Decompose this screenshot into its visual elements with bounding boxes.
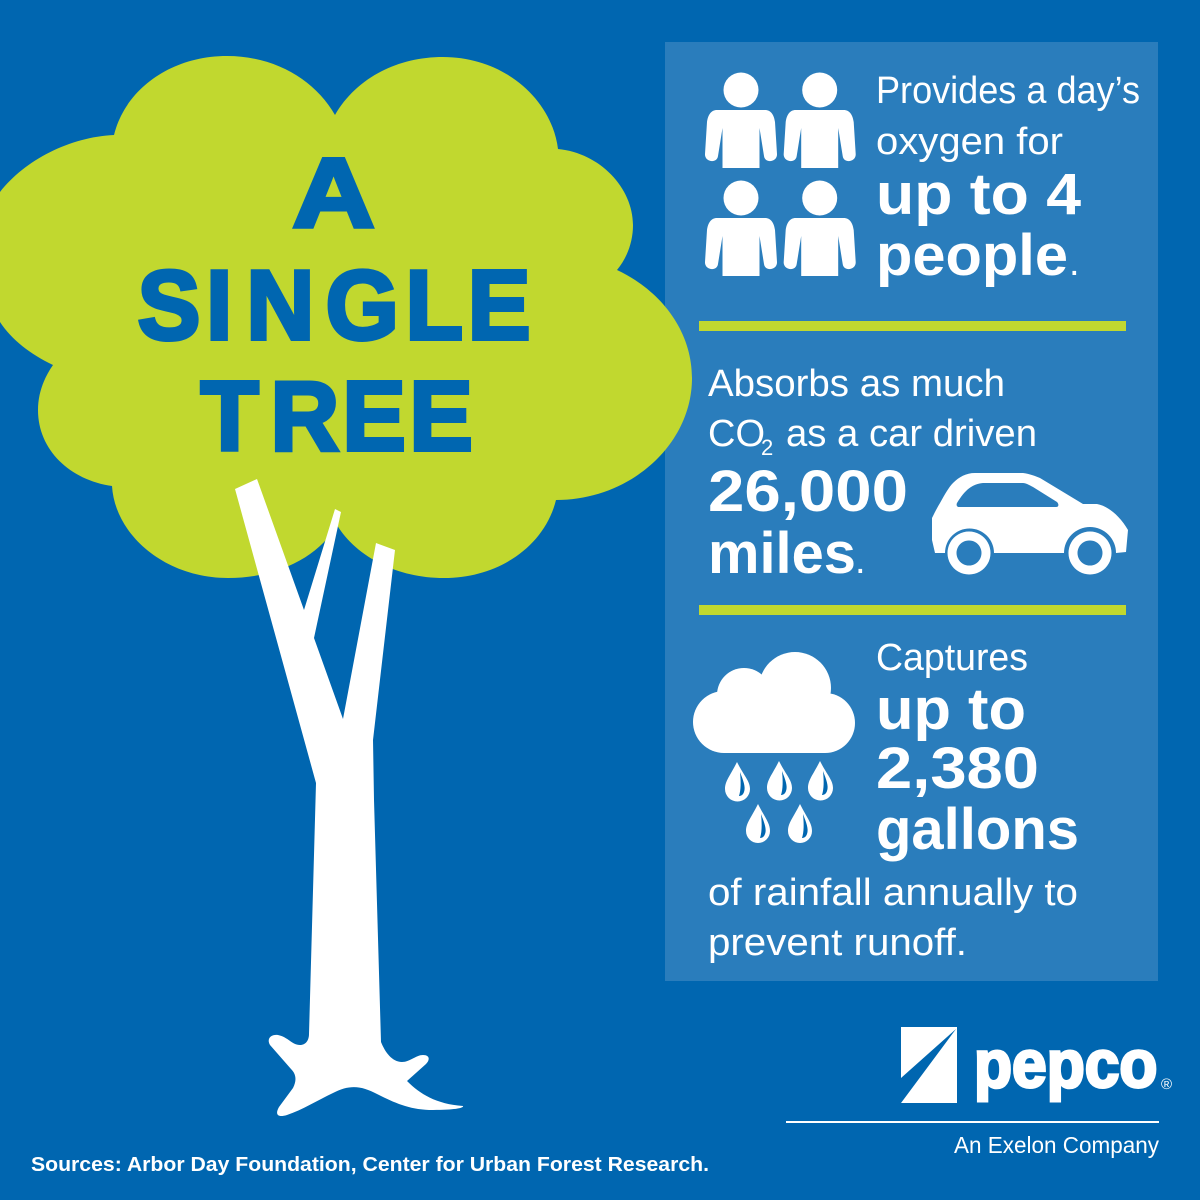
- text: CO2: miles: [708, 521, 856, 586]
- sources: Sources: Arbor Day Foundation, Center for Urban Forest Research.: [31, 1154, 709, 1176]
- text: oxygen: oxygen for: [876, 121, 1063, 163]
- text: oxygen: up to 4: [876, 162, 1081, 227]
- text: CO2: 2: [761, 435, 773, 460]
- title: A: [292, 139, 375, 248]
- tree canopy: [0, 56, 692, 578]
- text: rainfall: prevent runoff.: [708, 922, 967, 964]
- text: CO2: as a car driven: [786, 413, 1037, 455]
- panel: benefits: [665, 42, 1158, 981]
- title: SINGLE: [138, 251, 530, 360]
- text: CO2: .: [855, 540, 866, 582]
- divider: [699, 321, 1126, 331]
- divider: [699, 605, 1126, 615]
- text: oxygen: [876, 70, 1140, 288]
- text: rainfall: 2,380: [876, 736, 1039, 801]
- text: oxygen: .: [1069, 242, 1080, 284]
- logo: pepco: pepco: [974, 1026, 1157, 1101]
- text: rainfall: up to: [876, 677, 1026, 742]
- text: rainfall: Captures: [876, 637, 1028, 679]
- text: rainfall: [708, 637, 1079, 964]
- icon: car: [932, 473, 1128, 574]
- text: CO2: CO: [708, 413, 765, 455]
- title: TREE: [201, 363, 473, 471]
- text: CO2: Absorbs as much: [708, 363, 1005, 405]
- icon: rain cloud: [693, 652, 855, 843]
- text: rainfall: of rainfall annually to: [708, 872, 1078, 914]
- text: CO2: [708, 363, 1037, 586]
- logo: pepco: ®: [1161, 1076, 1172, 1093]
- text: oxygen: people: [876, 223, 1068, 288]
- text: rainfall: gallons: [876, 797, 1079, 862]
- logo: pepco: An Exelon Company: [954, 1132, 1159, 1158]
- tree trunk: [235, 479, 463, 1116]
- logo: pepco: [786, 1026, 1172, 1158]
- text: oxygen: Provides a day’s: [876, 70, 1140, 112]
- title: [138, 139, 530, 471]
- icon: four people: [705, 72, 856, 276]
- text: CO2: 26,000: [708, 459, 908, 524]
